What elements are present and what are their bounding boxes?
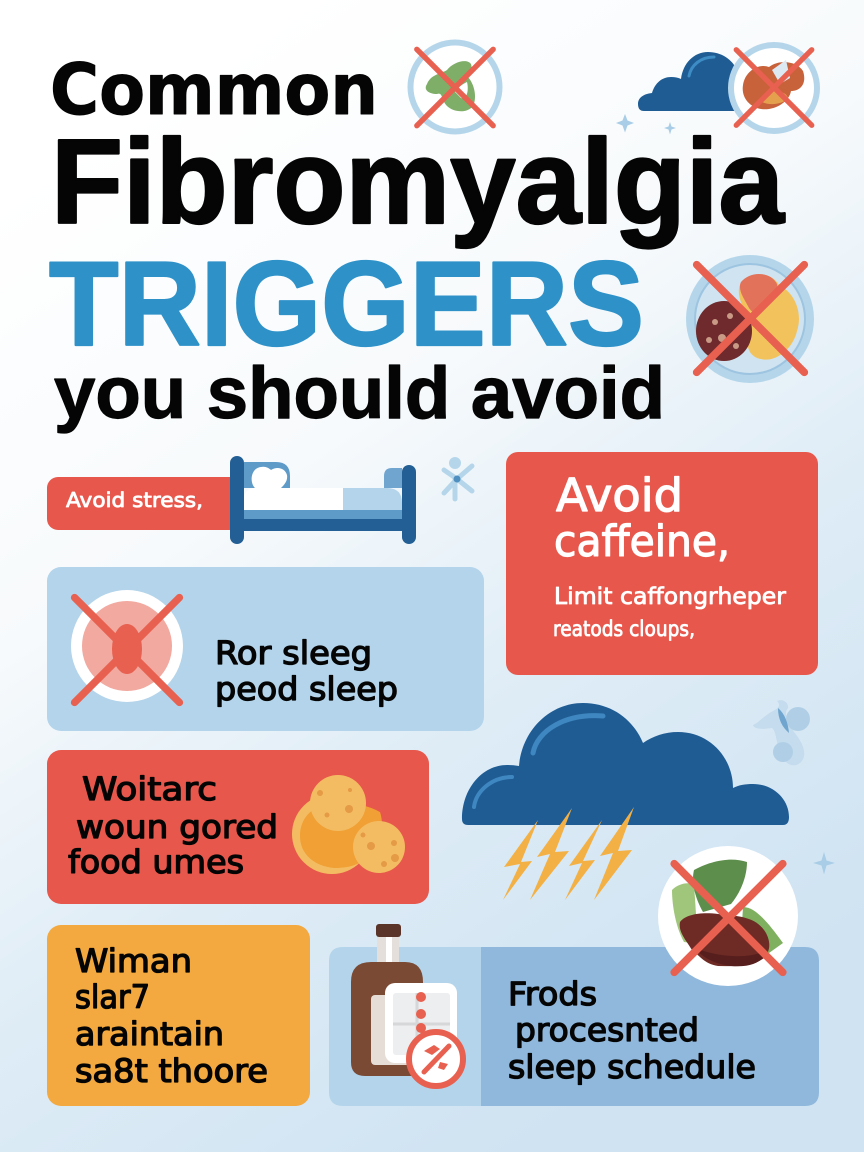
icon: crossed-out plate [686,255,814,383]
icon: sparkles [616,114,676,134]
panel: avoid caffeine: Limit caffongrheper [554,584,787,610]
panel: avoid caffeine: Avoid [556,469,683,522]
panel: avoid caffeine: reatods cloups, [553,617,695,641]
panel: sleep: peod sleep [215,670,398,708]
title: Common [50,49,378,131]
panel: maintain: Wiman [75,942,192,980]
icon: crossed-out leaves and meat [658,846,798,986]
icon: cookies [292,775,405,874]
panel: avoid stress: Avoid stress, [66,488,203,512]
panel: processed foods: sleep schedule [508,1048,756,1086]
panel: avoid caffeine: caffeine, [554,517,730,567]
icon: sparkle [813,852,835,874]
title [49,49,785,434]
panel: food: Woitarc [82,770,217,808]
panel: maintain: araintain [75,1015,224,1053]
panel: avoid caffeine [506,452,818,675]
panel: sleep [47,567,484,731]
icon: crossed-out pain spot [71,590,183,702]
icon: crossed-out greens [410,42,500,132]
icon: small cloud [638,52,737,111]
panel: maintain: slar7 [75,978,150,1016]
icon: pale droplets deco [753,700,810,765]
panel: food: food umes [68,843,244,881]
panel: food: woun gored [76,808,278,846]
panel: processed foods: Frods [508,975,597,1013]
panel: sleep: Ror sleeg [215,634,372,672]
icon: crossed-out fried food [731,45,817,131]
panel: processed foods: procesnted [515,1011,699,1049]
panel: maintain [47,925,310,1106]
title: you should avoid [54,353,665,434]
panel: food [47,750,429,904]
icon: pale fan deco [444,460,472,499]
icon: storm cloud [462,703,789,825]
panel: processed foods [329,947,819,1106]
icon: bed [230,456,416,544]
panel: avoid stress [47,477,242,530]
icon: lightning bolts [503,807,634,900]
icon: bottle with badge [351,924,463,1086]
title: TRIGGERS [49,237,644,371]
panel: maintain: sa8t thoore [75,1052,268,1090]
title: Fibromyalgia [51,115,785,249]
